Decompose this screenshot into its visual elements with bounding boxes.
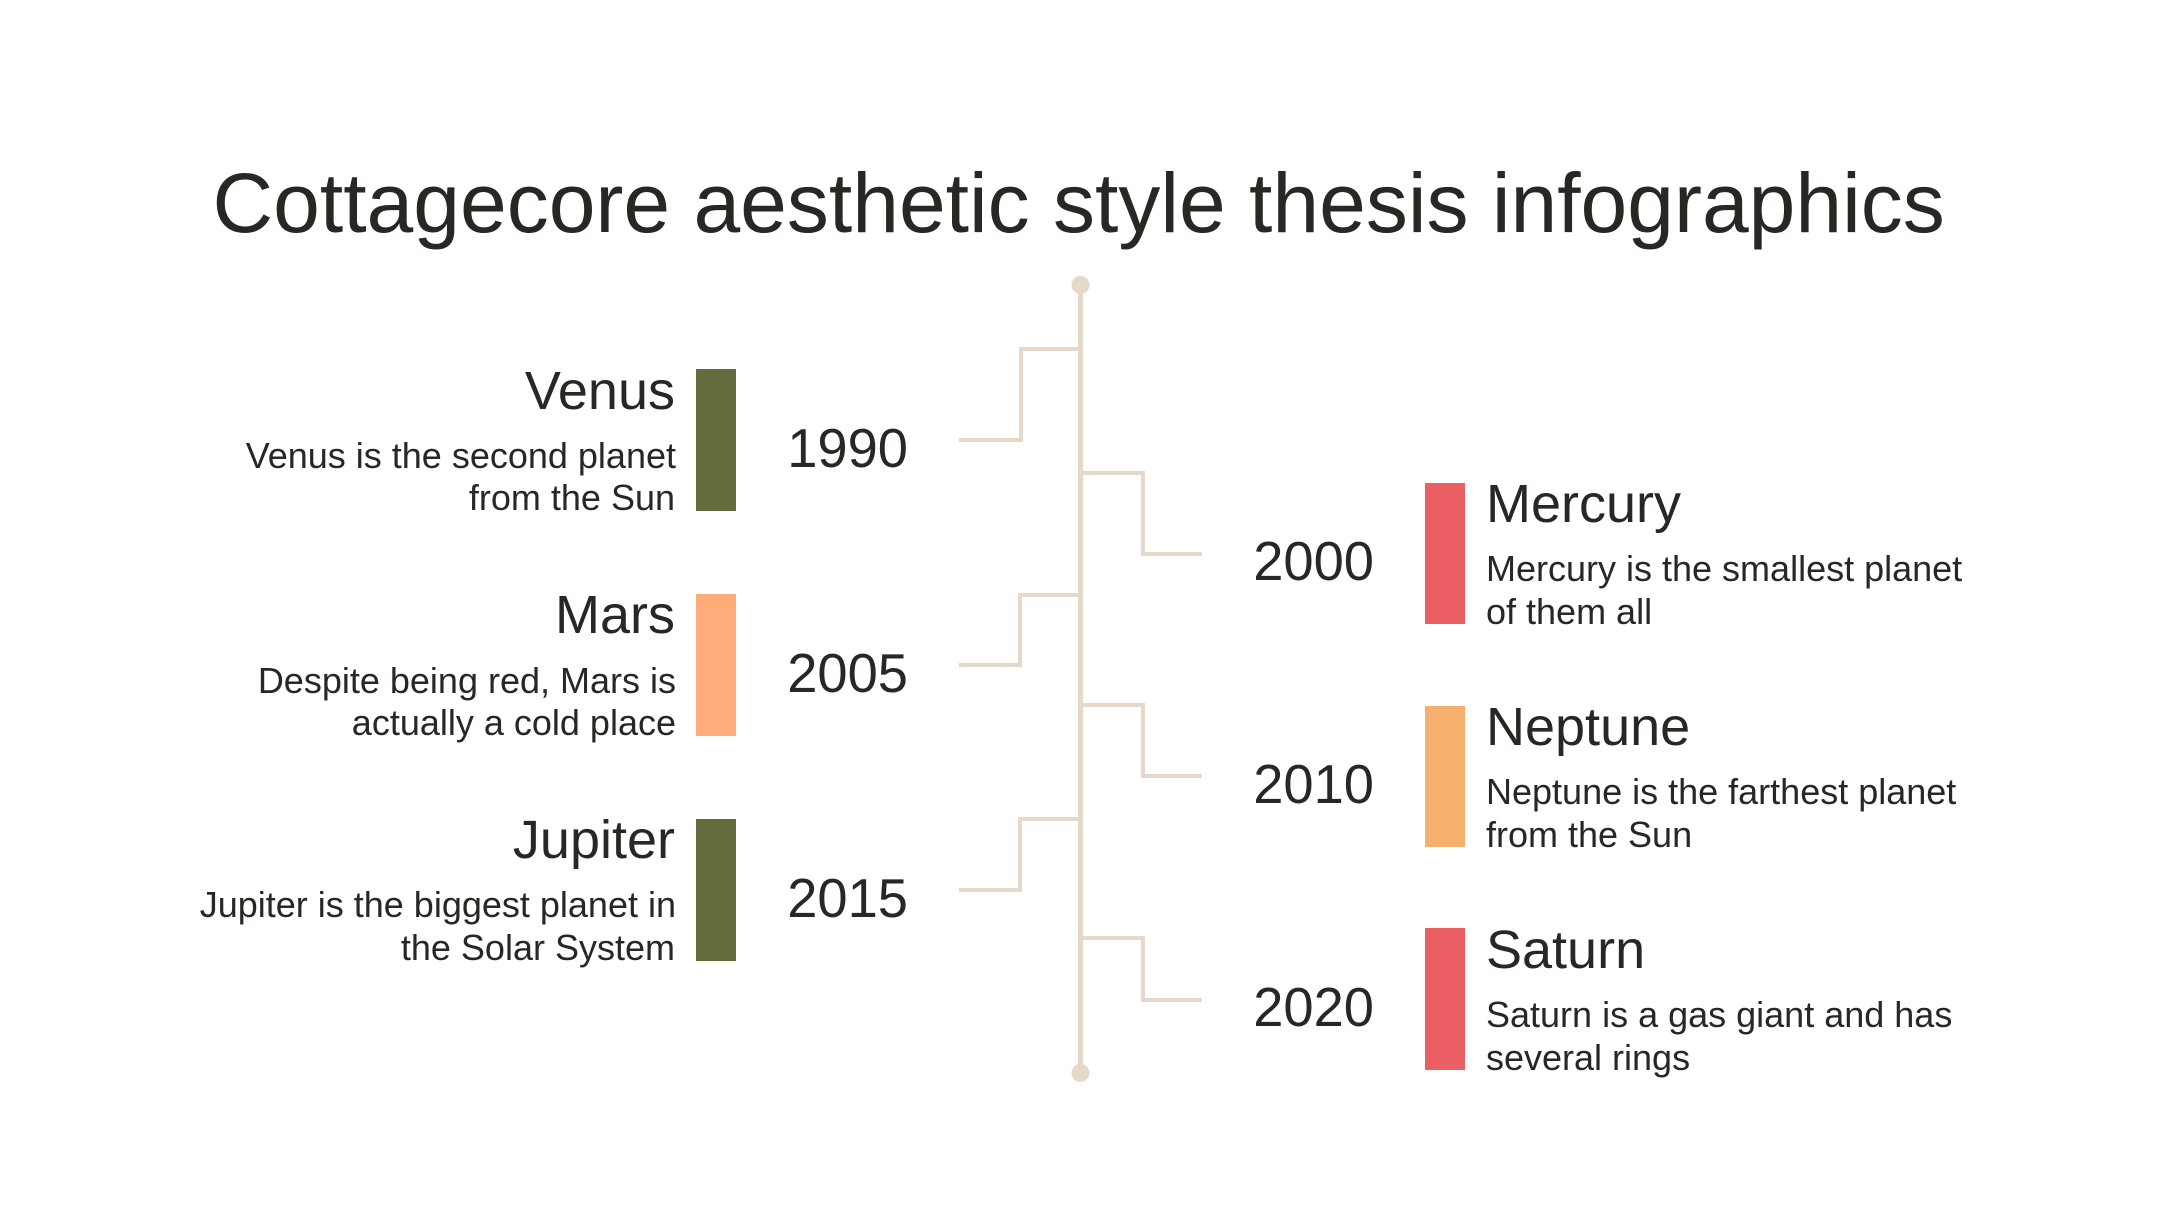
description: Saturn: Saturn is a gas giant and has [1486, 994, 1952, 1035]
entry: Jupiter 2015 [200, 810, 908, 968]
year: 2015: 2015 [787, 868, 908, 929]
colour bar: Neptune [1425, 706, 1465, 847]
heading: Jupiter: Jupiter [513, 810, 675, 870]
colour bar: Mercury [1425, 483, 1465, 624]
year: 1990: 1990 [787, 418, 908, 479]
description: Neptune: from the Sun [1486, 814, 1692, 855]
year: 2000: 2000 [1253, 531, 1374, 592]
description: Saturn [1486, 994, 1952, 1078]
year: 2005: 2005 [787, 643, 908, 704]
description: Mercury: of them all [1486, 591, 1652, 632]
description: Mercury: Mercury is the smallest planet [1486, 548, 1962, 589]
colour bar: Mars [696, 594, 736, 736]
year: 2020: 2020 [1253, 977, 1374, 1038]
description: Venus [246, 435, 676, 518]
description: Venus: from the Sun [469, 477, 675, 518]
connector: 2020 [1080, 938, 1202, 1000]
description: Jupiter: Jupiter is the biggest planet in [200, 884, 676, 925]
colour bar: Jupiter [696, 819, 736, 961]
description: Venus: Venus is the second planet [246, 435, 676, 476]
description: Saturn: several rings [1486, 1037, 1690, 1078]
description: Neptune: Neptune is the farthest planet [1486, 771, 1956, 812]
entry: Saturn 2020 [1253, 920, 1952, 1078]
connector: 2005 [959, 595, 1080, 665]
connector: 2010 [1080, 705, 1202, 776]
colour bar: Venus [696, 369, 736, 511]
heading: Neptune: Neptune [1486, 697, 1690, 757]
connector: 2000 [1080, 473, 1202, 554]
description: Mars [258, 660, 676, 743]
connector: 2015 [959, 819, 1080, 890]
description: Mars: actually a cold place [352, 702, 676, 743]
entry: Venus 1990 [246, 361, 908, 518]
title: Cottagecore aesthetic style thesis infographics [212, 156, 1945, 250]
description: Neptune [1486, 771, 1956, 855]
entry: Neptune 2010 [1253, 697, 1956, 855]
heading: Mercury: Mercury [1486, 474, 1681, 534]
description: Jupiter: the Solar System [401, 927, 675, 968]
connector: 1990 [959, 349, 1080, 440]
description: Mars: Despite being red, Mars is [258, 660, 676, 701]
description: Jupiter [200, 884, 676, 968]
heading: Saturn: Saturn [1486, 920, 1645, 980]
heading: Mars: Mars [555, 585, 675, 645]
entry: Mars 2005 [258, 585, 908, 743]
heading: Venus: Venus [525, 361, 675, 421]
timeline axis [1072, 276, 1090, 1082]
year: 2010: 2010 [1253, 754, 1374, 815]
description: Mercury [1486, 548, 1962, 632]
colour bar: Saturn [1425, 928, 1465, 1070]
entry: Mercury 2000 [1253, 474, 1962, 632]
